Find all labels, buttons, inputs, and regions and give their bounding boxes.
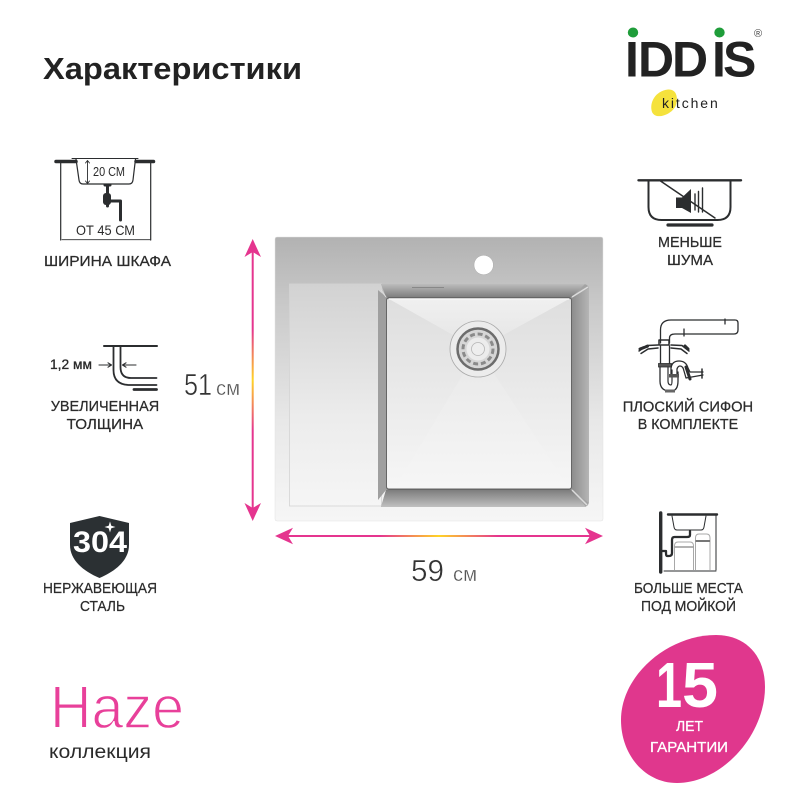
feature: flat siphon (623, 319, 753, 433)
logo: IDDIS kitchen: kitchen (662, 95, 720, 111)
icon: siphon (639, 319, 738, 392)
height label: см (216, 378, 240, 400)
feature: thickness: ТОЛЩИНА (67, 416, 143, 433)
title: Характеристики (43, 51, 302, 86)
width label: см (453, 564, 477, 586)
feature: less noise: МЕНЬШЕ (658, 234, 722, 251)
badge: 15 years warranty: ЛЕТ (676, 718, 703, 735)
bowl walls (378, 284, 589, 507)
badge: 15 years warranty (621, 635, 765, 783)
panel: sink photo (275, 237, 603, 521)
feature: more storage: БОЛЬШЕ МЕСТА (634, 580, 743, 597)
width label: 59 (411, 553, 444, 588)
icon: 304 shield: 304 (73, 526, 127, 559)
feature: thickness: УВЕЛИЧЕННАЯ (51, 398, 159, 415)
icon: muted sink (638, 180, 741, 225)
feature: 304 steel (43, 516, 157, 615)
feature: more storage: ПОД МОЙКОЙ (641, 597, 736, 615)
feature: less noise (638, 180, 741, 269)
logo: IDDIS kitchen: ® (754, 28, 762, 40)
feature: cabinet width (44, 158, 171, 270)
feature: flat siphon: В КОМПЛЕКТЕ (638, 416, 738, 433)
collection name: Haze (50, 674, 184, 741)
height label: 51 (184, 367, 212, 402)
icon: faucet hole (474, 255, 493, 275)
icon: drain strainer (450, 321, 506, 377)
drainboard (290, 284, 382, 506)
height label (184, 367, 240, 402)
icon: sink in cabinet (56, 158, 154, 240)
bowl floor (386, 297, 572, 490)
icon: sink in cabinet: ОТ 45 СМ (76, 222, 135, 238)
badge: 15 years warranty: ГАРАНТИИ (650, 739, 728, 756)
icon: sink in cabinet: 20 СМ (93, 165, 125, 179)
width label (411, 553, 477, 588)
feature: flat siphon: ПЛОСКИЙ СИФОН (623, 398, 753, 416)
feature: more storage (634, 513, 743, 615)
icon: cabinet with storage (661, 513, 717, 572)
collection name: коллекция (49, 742, 151, 763)
badge: 15 years warranty: 1 (656, 649, 682, 721)
icon: steel thickness: 1,2 мм (50, 357, 92, 372)
feature: thickness (50, 346, 159, 433)
logo: IDDIS kitchen: IDDIS (625, 32, 756, 88)
arrow: height dimension (244, 239, 261, 521)
logo: IDDIS kitchen (625, 28, 762, 116)
arrow: width dimension (275, 528, 603, 544)
feature: 304 steel: НЕРЖАВЕЮЩАЯ (43, 580, 157, 597)
feature: cabinet width: ШИРИНА ШКАФА (44, 253, 171, 270)
feature: less noise: ШУМА (667, 252, 713, 269)
feature: 304 steel: СТАЛЬ (80, 598, 125, 615)
badge: 15 years warranty: 5 (682, 649, 718, 721)
